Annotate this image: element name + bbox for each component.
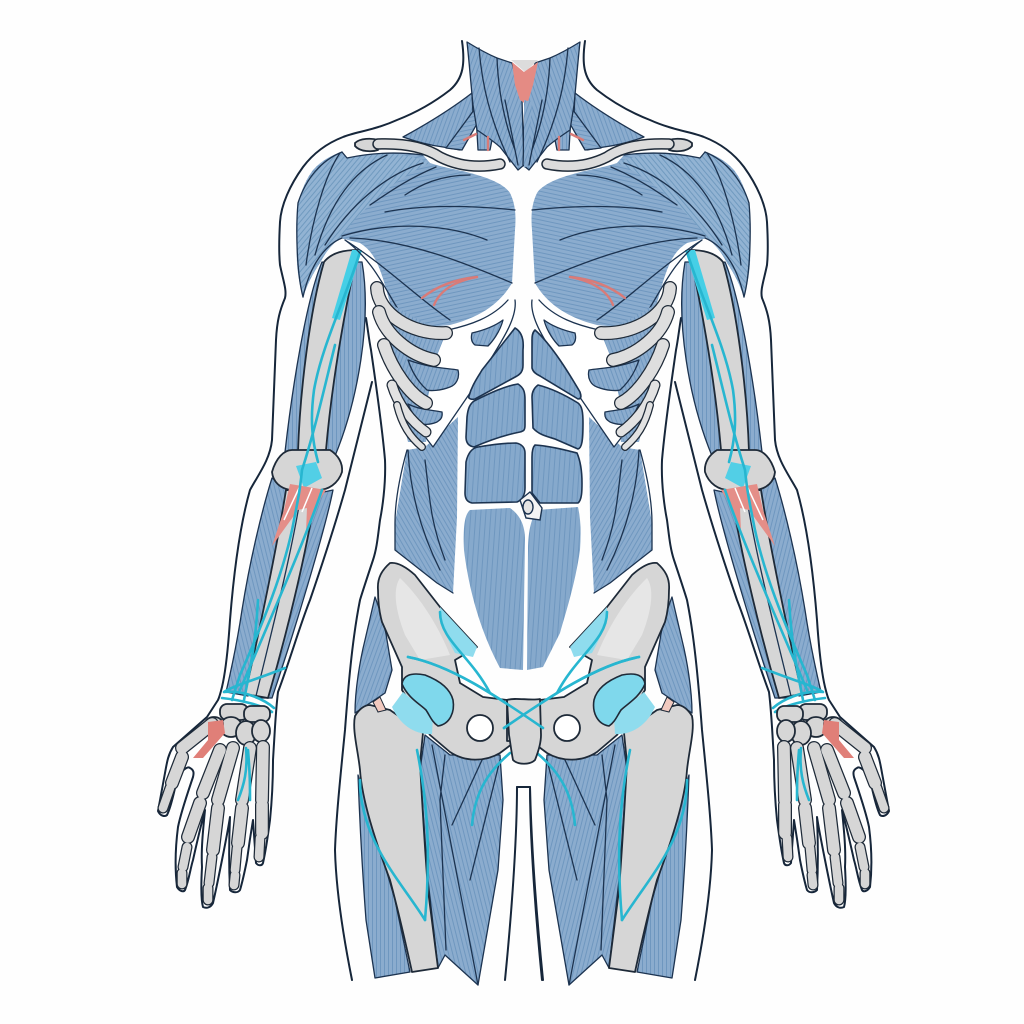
forearm muscles — [226, 478, 333, 698]
inner right leg outline — [517, 787, 543, 980]
hip joint — [373, 674, 453, 734]
finger bones — [163, 724, 263, 900]
forearm bones — [245, 490, 316, 698]
outer thigh muscle — [358, 775, 410, 978]
femur — [354, 705, 438, 972]
clavicle — [355, 139, 500, 166]
arm nerves — [222, 250, 362, 712]
neck red muscle — [511, 60, 538, 168]
pelvis — [378, 563, 540, 760]
inner thigh muscles — [420, 735, 503, 985]
obturator foramen — [467, 715, 493, 741]
pectoral and deltoid — [296, 152, 515, 326]
oblique muscle — [395, 417, 458, 593]
pelvic nerves — [360, 612, 543, 920]
left half of body — [158, 41, 543, 985]
hand tendon — [238, 748, 250, 800]
elbow — [272, 450, 342, 490]
crossing nerves — [408, 657, 639, 728]
umbilicus — [520, 492, 542, 520]
iliac cyan patch — [440, 607, 477, 657]
wrist bones — [205, 704, 270, 745]
hand — [163, 704, 270, 900]
neck muscles — [403, 42, 524, 170]
body outline — [158, 41, 517, 980]
abdominal muscles — [464, 328, 583, 670]
forearm red muscle — [272, 484, 326, 546]
hip muscle — [355, 597, 392, 713]
left abs — [464, 328, 525, 670]
humerus — [298, 250, 358, 452]
rib cage — [377, 288, 515, 447]
pubic symphysis — [507, 699, 541, 764]
upper arm muscles — [285, 262, 365, 456]
right abs — [527, 330, 583, 670]
right half of body — [504, 41, 889, 985]
thumb muscle — [193, 720, 225, 758]
